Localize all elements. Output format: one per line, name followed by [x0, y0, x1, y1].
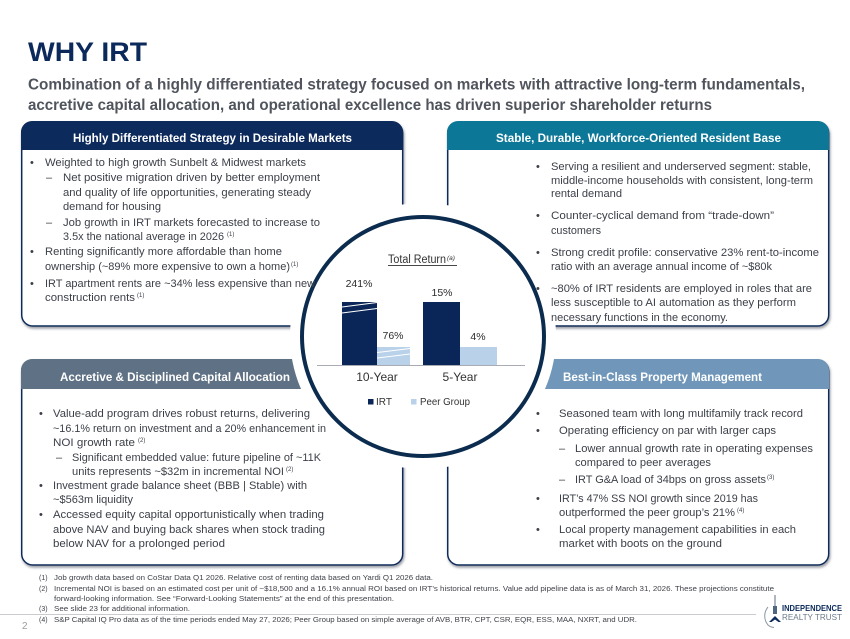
- bar chart: 4%: [470, 331, 486, 343]
- panel text: IRT’s 47% SS NOI growth since 2019 has: [559, 493, 758, 505]
- panel text: Net positive migration driven by better employment: [63, 172, 320, 184]
- footnotes: See slide 23 for additional information.: [54, 606, 190, 613]
- panel heading: Accretive & Disciplined Capital Allocation: [60, 370, 290, 384]
- panel text: •: [536, 493, 540, 505]
- panel text: below NAV for a prolonged period: [53, 538, 225, 550]
- panel text: construction rents: [45, 292, 136, 304]
- panel text: 3.5x the national average in 2026: [63, 231, 224, 243]
- panel: capital allocation: [21, 359, 403, 565]
- panel text: –: [559, 474, 566, 486]
- panel text: (2): [138, 438, 145, 444]
- icon: spire emblem: [765, 595, 781, 628]
- panel text: Job growth in IRT markets forecasted to increase to: [63, 217, 320, 229]
- footnotes: Job growth data based on CoStar Data Q1 2026. Relative cost of renting data based on Yardi Q1 2026 data.: [54, 575, 433, 582]
- subtitle: accretive capital allocation, and operational excellence has driven superior shareholder returns: [28, 97, 712, 114]
- footnotes: (3): [39, 606, 48, 613]
- chart: total return circle: [302, 217, 544, 456]
- panel text: middle-income households with consistent, long-term: [551, 175, 813, 187]
- panel text: ratio with an average annual income of ~$80k: [551, 261, 772, 273]
- panel text: •: [536, 247, 540, 259]
- panel text: •: [30, 157, 34, 169]
- logo: Independence Realty Trust: [765, 595, 842, 628]
- panel text: ownership (~89% more expensive to own a home): [45, 261, 290, 273]
- panel text: •: [39, 408, 43, 420]
- panel text: (1): [291, 262, 298, 268]
- footnotes: (2): [39, 586, 48, 593]
- logo: Independence Realty Trust: INDEPENDENCE: [782, 603, 842, 613]
- footnotes: forward-looking information. See “Forward-Looking Statements” at the end of this presentation.: [54, 596, 394, 603]
- panel text: compared to peer averages: [575, 457, 711, 469]
- panel: stable resident base: [447, 121, 829, 326]
- footnotes: S&P Capital IQ Pro data as of the time periods ended May 27, 2026; Peer Group based on simple average of AVB, BTR, CPT, CSR, EQR, ESS, MAA, NXRT, and UDR.: [54, 617, 637, 624]
- panel text: Accessed equity capital opportunistically when trading: [53, 509, 324, 521]
- panel text: Renting significantly more affordable than home: [45, 246, 282, 258]
- panel text: –: [56, 452, 63, 464]
- title: WHY IRT: [28, 37, 148, 67]
- panel text: ~80% of IRT residents are employed in roles that are: [551, 283, 812, 295]
- panel text: (2): [286, 467, 293, 473]
- panel text: •: [39, 509, 43, 521]
- panel text: •: [536, 524, 540, 536]
- panel text: necessary functions in the economy.: [551, 312, 728, 324]
- panel text: Significant embedded value: future pipeline of ~11K: [72, 452, 322, 464]
- chart legend: Peer Group: [420, 397, 470, 408]
- chart title: Total Return: [388, 254, 446, 266]
- panel heading: Highly Differentiated Strategy in Desirable Markets: [73, 131, 352, 145]
- bar chart: 76%: [382, 330, 404, 342]
- panel text: –: [46, 172, 53, 184]
- bar chart: 241%: [346, 278, 372, 290]
- panel text: •: [30, 246, 34, 258]
- panel text: Counter-cyclical demand from “trade-down”: [551, 210, 774, 222]
- panel text: •: [536, 425, 540, 437]
- chart legend: [368, 397, 470, 408]
- panel text: NOI growth rate: [53, 437, 135, 449]
- panel text: Serving a resilient and underserved segment: stable,: [551, 161, 811, 173]
- panel text: (1): [227, 232, 234, 238]
- panel text: (3): [767, 475, 774, 481]
- panel text: IRT G&A load of 34bps on gross assets: [575, 474, 766, 486]
- panel text: Value-add program drives robust returns, delivering: [53, 408, 310, 420]
- panel text: •: [536, 210, 540, 222]
- logo: Independence Realty Trust: REALTY TRUST: [782, 612, 842, 622]
- panel text: rental demand: [551, 188, 622, 200]
- bar chart: 10-Year: [356, 370, 398, 384]
- panel text: demand for housing: [63, 201, 161, 213]
- panel text: •: [39, 480, 43, 492]
- footnotes: (1): [39, 575, 48, 582]
- panel text: [536, 408, 813, 550]
- panel heading: Stable, Durable, Workforce-Oriented Resident Base: [496, 131, 781, 145]
- panel text: Strong credit profile: conservative 23% rent-to-income: [551, 247, 819, 259]
- panel text: less susceptible to AI automation as they perform: [551, 297, 796, 309]
- panel text: –: [559, 443, 566, 455]
- chart title: (a): [447, 255, 455, 262]
- bar chart: [317, 278, 525, 384]
- panel text: outperformed the peer group’s 21%: [559, 507, 735, 519]
- panel text: Investment grade balance sheet (BBB | Stable) with: [53, 480, 307, 492]
- panel: property management: [447, 359, 829, 565]
- panel text: above NAV and buying back shares when stock trading: [53, 524, 325, 536]
- panel text: Local property management capabilities in each: [559, 524, 796, 536]
- panel text: Lower annual growth rate in operating expenses: [575, 443, 813, 455]
- panel text: (4): [737, 508, 744, 514]
- panel text: •: [536, 283, 540, 295]
- panel text: –: [46, 217, 53, 229]
- chart legend: IRT: [376, 397, 392, 408]
- panel text: ~16.1% return on investment and a 20% enhancement in: [53, 423, 326, 435]
- panel text: market with boots on the ground: [559, 538, 722, 550]
- footnotes: [39, 575, 774, 624]
- panel text: ~$563m liquidity: [53, 494, 133, 506]
- panel text: •: [30, 278, 34, 290]
- panel text: (1): [137, 293, 144, 299]
- panel heading: Best-in-Class Property Management: [563, 370, 762, 384]
- footer rule and page number: 2: [22, 621, 28, 632]
- panel: highly differentiated strategy: [21, 121, 403, 326]
- bar chart: 15%: [431, 287, 453, 299]
- panel text: IRT apartment rents are ~34% less expensive than new: [45, 278, 315, 290]
- panel text: •: [536, 408, 540, 420]
- panel text: and quality of life opportunities, generating steady: [63, 187, 312, 199]
- panel text: Seasoned team with long multifamily track record: [559, 408, 803, 420]
- footnotes: (4): [39, 617, 48, 624]
- bar chart: 5-Year: [443, 370, 477, 384]
- panel text: [536, 161, 819, 324]
- subtitle: Combination of a highly differentiated strategy focused on markets with attractive long-term fundamentals,: [28, 76, 805, 94]
- panel text: units represents ~$32m in incremental NOI: [72, 466, 284, 478]
- footnotes: Incremental NOI is based on an estimated cost per unit of ~$18,500 and a 16.1% annual ROI based on IRT’s historical returns. Value add pipeline data is as of March 31, 2026. These projections constitute: [54, 586, 774, 593]
- panel text: [30, 157, 320, 304]
- panel text: [39, 408, 326, 550]
- panel text: customers: [551, 225, 601, 237]
- panel text: Weighted to high growth Sunbelt & Midwest markets: [45, 157, 307, 169]
- panel text: Operating efficiency on par with larger caps: [559, 425, 777, 437]
- panel text: •: [536, 161, 540, 173]
- subtitle: [28, 76, 805, 114]
